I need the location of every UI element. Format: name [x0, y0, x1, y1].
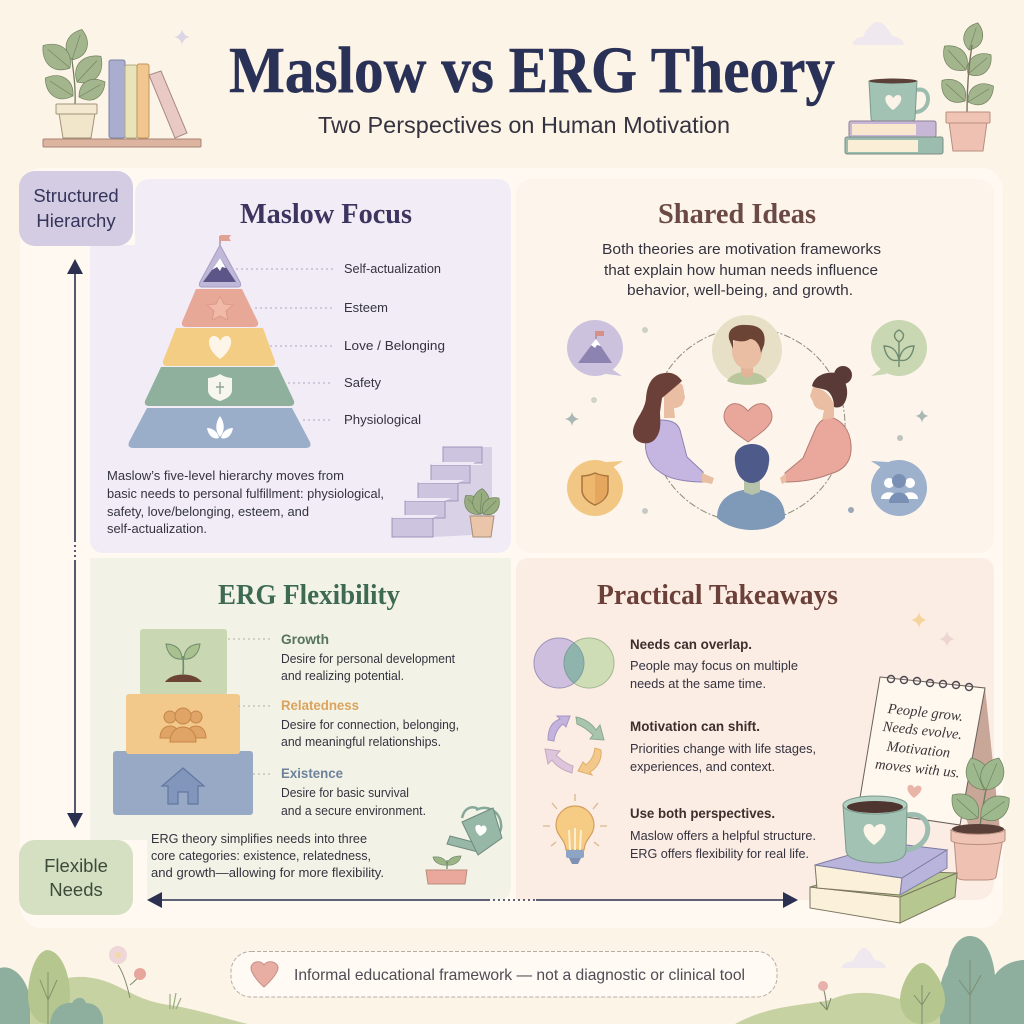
text: motivation can shift: Motivation can shift.	[630, 718, 760, 734]
text: ERG levels	[228, 631, 459, 818]
text: use both perspectives	[630, 805, 816, 861]
icon: group of people	[160, 708, 206, 742]
text: Shared Ideas description	[602, 242, 881, 299]
pyramid labels: Love / Belonging	[344, 338, 445, 353]
label: Structured Hierarchy: Hierarchy	[36, 210, 116, 231]
label: Flexible Needs: Needs	[49, 879, 103, 900]
icon: people speech bubble	[871, 460, 927, 516]
panel: ERG Flexibility	[90, 558, 511, 900]
text: ERG levels: Growth	[281, 631, 329, 647]
icon: cycle arrows	[545, 716, 604, 775]
icon: mountain speech bubble	[567, 320, 623, 376]
text: ERG levels: and a secure environment.	[281, 803, 426, 818]
illustration: left landscape	[0, 946, 248, 1024]
text: ERG levels: Existence	[281, 765, 343, 781]
text: ERG description: and growth—allowing for more flexibility.	[151, 865, 384, 880]
illustration: potted plant	[945, 754, 1016, 880]
illustration: notebook with handwritten note: Motivation	[885, 739, 951, 761]
subtitle: Two Perspectives on Human Motivation	[318, 112, 730, 138]
text: Maslow description: basic needs to personal fulfillment: physiological,	[107, 486, 384, 501]
text: ERG levels: Desire for connection, belonging,	[281, 717, 459, 732]
illustration: notebook with handwritten note: Needs evolve.	[881, 719, 963, 743]
text: motivation can shift: experiences, and context.	[630, 759, 775, 774]
icon: shield speech bubble	[567, 460, 623, 516]
text: motivation can shift: Priorities change with life stages,	[630, 741, 816, 756]
text: ERG levels: Relatedness	[281, 697, 359, 713]
illustration: plant and books on shelf	[36, 26, 201, 147]
icon: Venn diagram	[534, 638, 614, 688]
heading: Shared Ideas: Shared Ideas	[658, 199, 816, 230]
text: ERG levels: and meaningful relationships.	[281, 734, 441, 749]
label: Structured Hierarchy	[19, 171, 133, 246]
footer text: Informal educational framework — not a diagnostic or clinical tool	[294, 967, 745, 984]
chart: five-level pyramid	[128, 235, 310, 448]
illustration: notebook with handwritten note: People grow.	[886, 701, 964, 725]
illustration: notebook with handwritten note	[858, 676, 1000, 830]
panel: Practical Takeaways	[516, 558, 1016, 923]
icon: heart	[251, 962, 278, 987]
text: ERG levels: Desire for basic survival	[281, 785, 409, 800]
footer note	[231, 952, 777, 997]
illustration: book stack with mug	[810, 796, 957, 923]
icon: plant speech bubble	[871, 320, 927, 376]
illustration: stairs with plant	[392, 447, 504, 537]
illustration: right landscape	[735, 936, 1024, 1024]
text: Maslow description: safety, love/belonging, esteem, and	[107, 504, 309, 519]
text: Maslow description: self-actualization.	[107, 521, 207, 536]
text: ERG levels: Desire for personal development	[281, 651, 455, 666]
pyramid labels: Esteem	[344, 300, 388, 315]
text: Maslow description: Maslow’s five-level hierarchy moves from	[107, 468, 344, 483]
icon: house	[162, 768, 204, 804]
label: Structured Hierarchy: Structured	[33, 185, 119, 206]
text: needs can overlap: needs at the same time.	[630, 676, 766, 691]
heading: Practical Takeaways: Practical Takeaways	[597, 580, 838, 611]
text: motivation can shift	[630, 718, 816, 774]
axis: vertical arrow from Structured Hierarchy to Flexible Needs	[67, 259, 83, 828]
text: Shared Ideas description: behavior, well-being, and growth.	[627, 283, 853, 299]
text: needs can overlap: People may focus on multiple	[630, 658, 798, 673]
axis: horizontal arrow	[147, 892, 798, 908]
pyramid labels: Safety	[344, 375, 381, 390]
outer panel	[20, 168, 1003, 928]
text: Shared Ideas description: that explain how human needs influence	[604, 263, 878, 279]
decorative sparkles and dots	[565, 327, 928, 514]
heading: Maslow Focus: Maslow Focus	[240, 199, 412, 230]
text: Shared Ideas description: Both theories are motivation frameworks	[602, 242, 881, 258]
label: Flexible Needs	[19, 840, 133, 915]
text: use both perspectives: Maslow offers a helpful structure.	[630, 828, 816, 843]
illustration: three people around a heart	[633, 315, 852, 530]
pyramid labels: Physiological	[344, 412, 421, 427]
text: use both perspectives: ERG offers flexibility for real life.	[630, 846, 809, 861]
pyramid labels: Self-actualization	[344, 261, 441, 276]
text: ERG description: ERG theory simplifies needs into three	[151, 831, 367, 846]
text: Maslow description	[107, 468, 384, 536]
text: ERG levels: and realizing potential.	[281, 668, 404, 683]
text: needs can overlap: Needs can overlap.	[630, 636, 752, 652]
icon: lightbulb	[543, 794, 607, 864]
text: needs can overlap	[630, 636, 798, 691]
text: ERG description	[151, 831, 384, 880]
panel: Shared Ideas	[516, 179, 994, 553]
icon: sprout	[165, 644, 202, 682]
illustration: watering can and seedling	[426, 807, 502, 884]
text: use both perspectives: Use both perspectives.	[630, 805, 775, 821]
icon: sparkle	[174, 29, 190, 45]
label: Flexible Needs: Flexible	[44, 855, 108, 876]
pyramid labels	[236, 261, 445, 427]
decorative sparkles	[911, 612, 955, 647]
chart: three stacked ERG blocks	[113, 629, 253, 815]
title: Maslow vs ERG Theory	[229, 34, 835, 107]
illustration: notebook with handwritten note: moves with us.	[874, 757, 961, 781]
panel: Maslow Focus	[90, 179, 511, 553]
text: ERG description: core categories: existence, relatedness,	[151, 848, 371, 863]
heading: ERG Flexibility: ERG Flexibility	[218, 580, 400, 611]
illustration: cup, books and plant	[845, 20, 999, 154]
